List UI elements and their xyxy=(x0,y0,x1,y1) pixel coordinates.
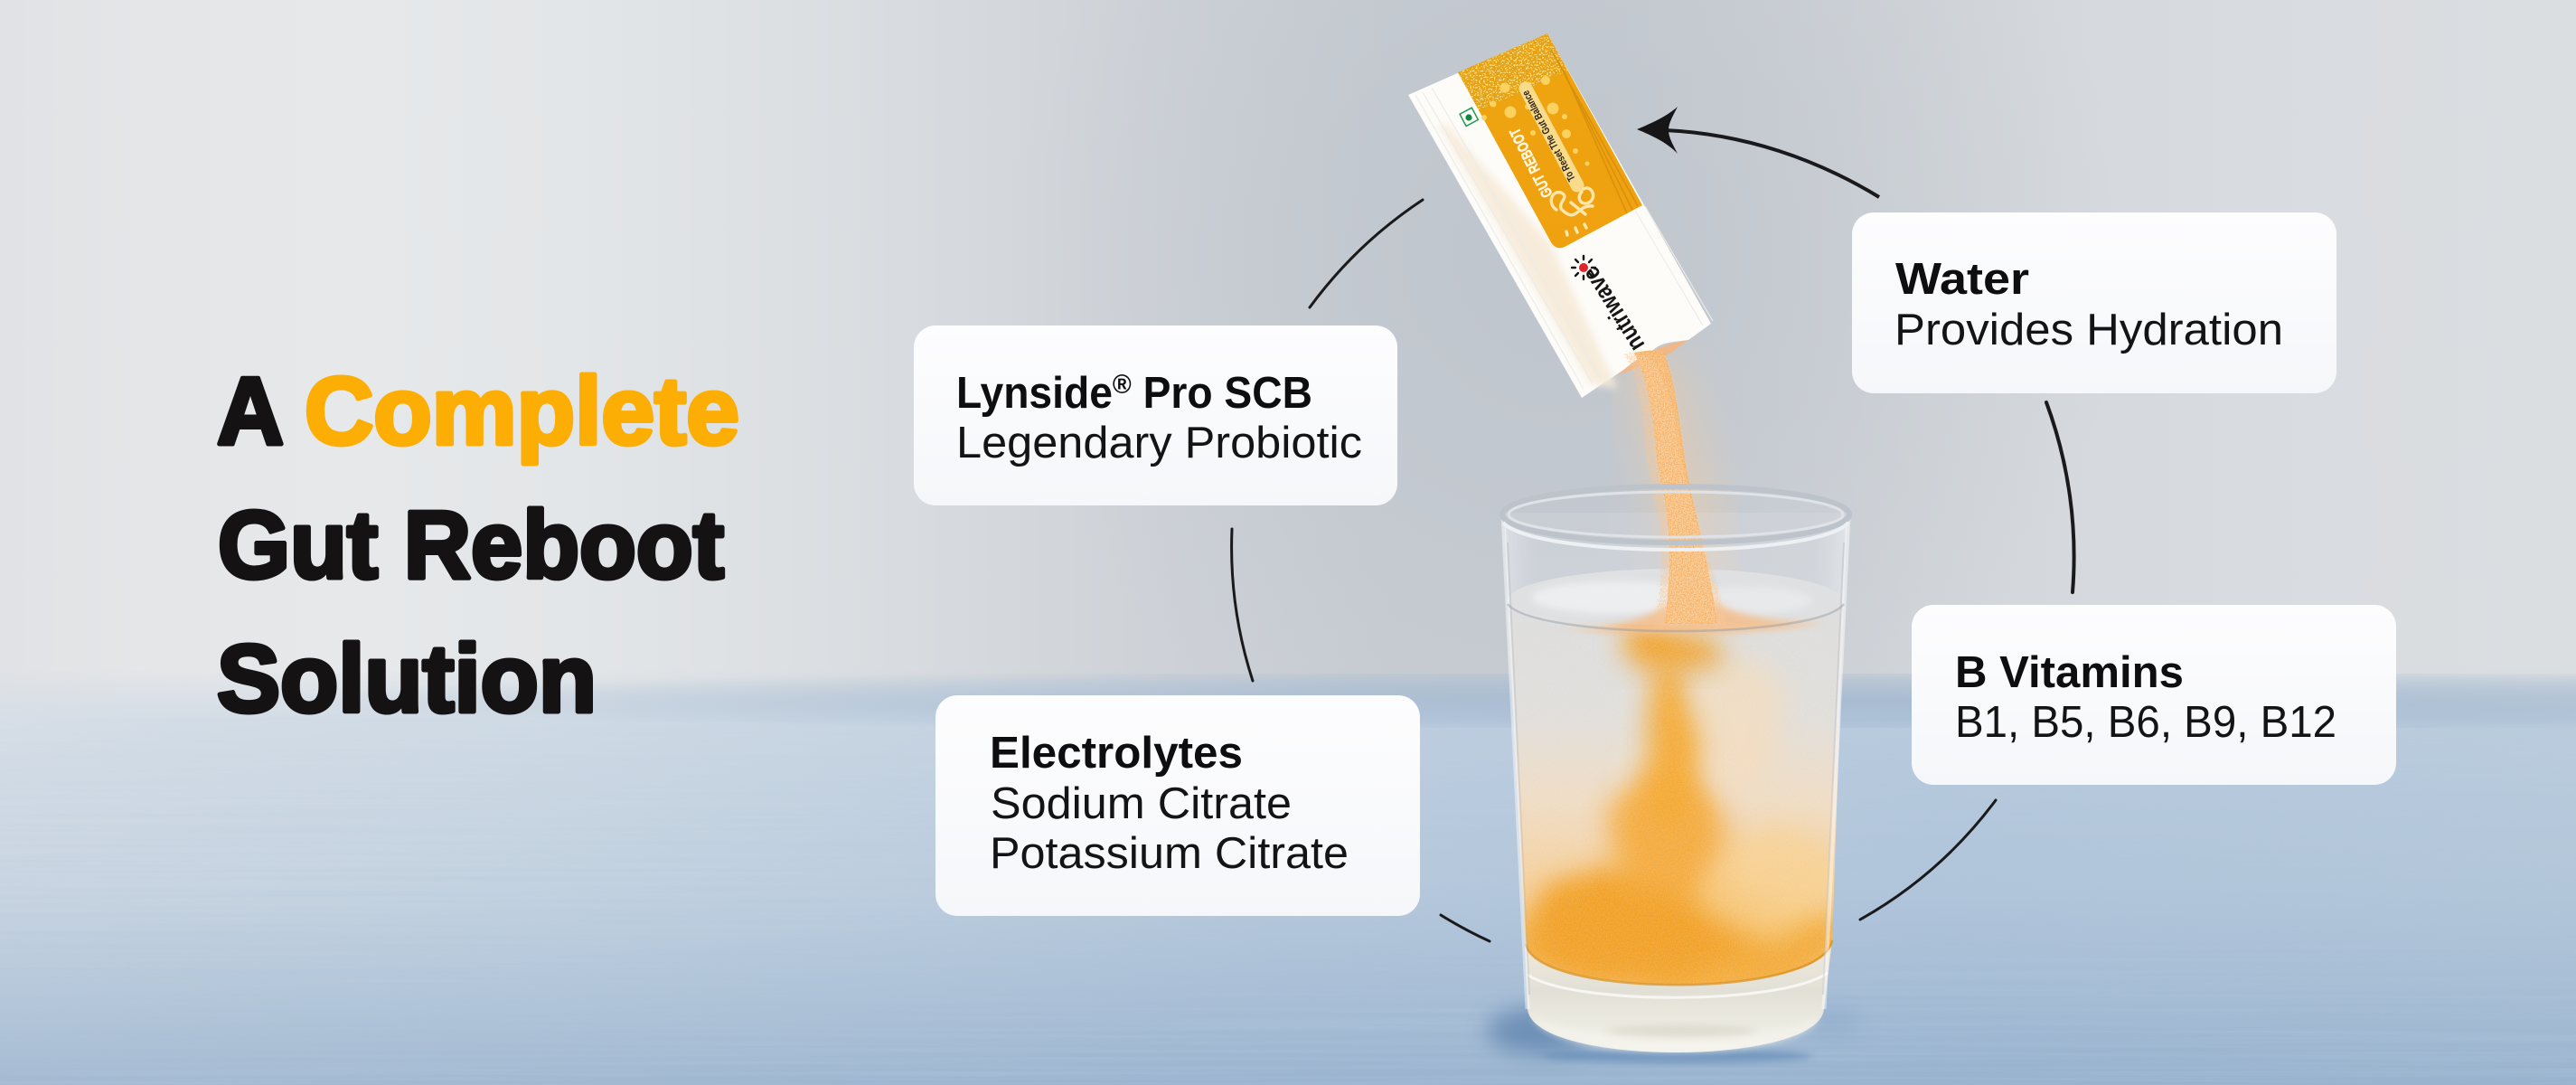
glass of water xyxy=(1500,351,1853,1052)
card: Electrolytes: Sodium Citrate xyxy=(991,779,1292,828)
powder stream glow xyxy=(1647,357,1704,606)
sachet orange panel xyxy=(1458,33,1642,248)
title: Gut Reboot xyxy=(218,492,724,599)
sachet tagline: To Reset The Gut Balance xyxy=(1520,89,1578,183)
water surface xyxy=(1507,569,1843,634)
veg mark xyxy=(1460,108,1478,126)
card: B Vitamins xyxy=(1912,605,2396,785)
card: Water xyxy=(1852,212,2336,393)
nutriwave logo text: nutriwave xyxy=(1577,262,1650,356)
card: Electrolytes xyxy=(935,695,1420,916)
liquid bottom edge xyxy=(1526,940,1832,985)
card: B Vitamins: B Vitamins xyxy=(1955,648,2184,697)
card: Electrolytes: Potassium Citrate xyxy=(990,829,1349,878)
card: Lynside Pro SCB xyxy=(914,326,1397,505)
title: Complete xyxy=(305,358,739,465)
tagline pill xyxy=(1526,89,1577,185)
glass thick base xyxy=(1525,940,1832,1052)
card: Lynside Pro SCB: Lynside xyxy=(956,369,1122,418)
sachet product name: GUT REBOOT xyxy=(1506,125,1556,201)
glass rim xyxy=(1502,486,1849,542)
plume of dissolving powder xyxy=(1523,624,1835,984)
card: Lynside Pro SCB: ® xyxy=(1113,370,1132,400)
glass above water xyxy=(1504,513,1847,625)
sachet opening xyxy=(1618,340,1688,375)
card: Electrolytes: Electrolytes xyxy=(990,729,1243,778)
title xyxy=(217,358,739,732)
liquid xyxy=(1508,601,1844,985)
cycle arcs xyxy=(1232,200,2074,941)
card: Water: Provides Hydration xyxy=(1894,306,2283,354)
sachet gold speckle xyxy=(1455,27,1638,213)
card: Water: Water xyxy=(1895,255,2029,304)
falling powder stream xyxy=(1625,351,1728,628)
card: Lynside Pro SCB: Legendary Probiotic xyxy=(956,419,1362,467)
nutriwave star logo xyxy=(1572,256,1595,279)
card: Lynside Pro SCB: Pro SCB xyxy=(1132,369,1312,418)
sachet inner tint xyxy=(1437,122,1618,389)
glass walls xyxy=(1503,515,1848,1009)
glass body xyxy=(1501,513,1850,1052)
table shadow under glass xyxy=(1487,1007,1862,1063)
sachet body xyxy=(1408,33,1711,398)
sachet seam lines xyxy=(1415,88,1713,389)
title: A xyxy=(217,358,284,465)
title: Solution xyxy=(217,626,597,732)
sachet sparkles xyxy=(1481,76,1589,166)
powder on water surface xyxy=(1537,592,1826,634)
arrow back to sachet xyxy=(1637,107,1879,197)
sachet xyxy=(1408,27,1713,398)
gut icon xyxy=(1551,188,1594,235)
card: B Vitamins: B1, B5, B6, B9, B12 xyxy=(1955,698,2336,747)
